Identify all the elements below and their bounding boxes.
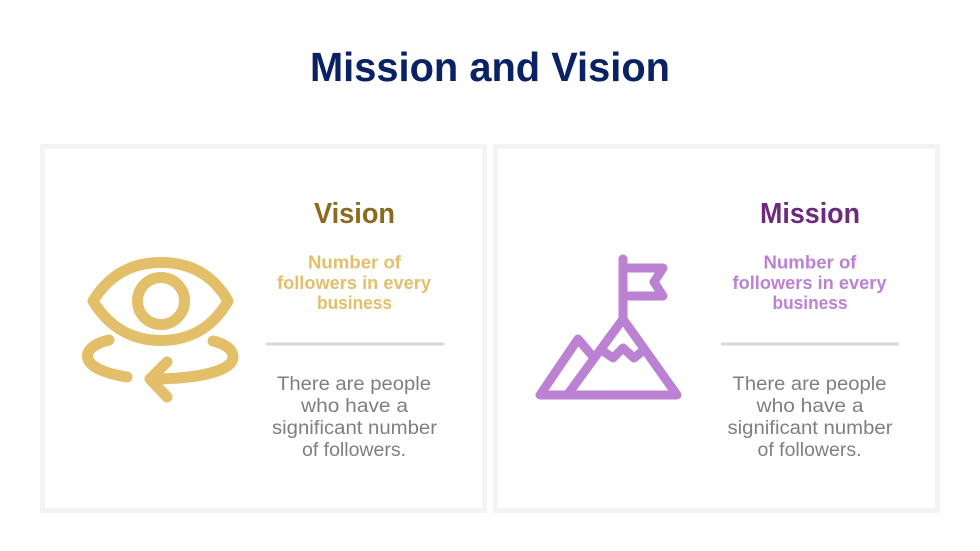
body text: vision: There are people [277,374,431,395]
panel: vision [42,146,484,510]
body text: vision [272,374,438,461]
panel frame: vision [42,146,484,510]
subheading: vision: followers in every [277,272,432,293]
body text: mission: significant number [728,418,893,439]
divider [721,342,899,346]
subheading: vision: Number of [308,252,402,272]
body text: mission: of followers. [758,440,862,461]
body text: mission [728,374,893,461]
body text: vision: who have a [300,396,408,417]
subheading: mission: business [772,292,848,313]
body text: mission: There are people [732,374,886,395]
subheading: vision: business [317,292,392,313]
body text: vision: of followers. [302,440,406,461]
body text: mission: who have a [755,396,864,417]
subheading: vision [277,252,432,313]
body text: vision: significant number [272,418,438,439]
panel frame: mission [496,146,938,510]
divider [266,342,444,346]
icon: eye with rotation arrow [88,262,233,397]
heading: mission: Mission [760,198,860,230]
icon: mountain with flag [540,259,677,395]
title: Mission and Vision [310,44,670,90]
heading: vision: Vision [314,198,395,230]
subheading: mission: followers in every [732,272,887,293]
subheading: mission: Number of [764,252,857,272]
panel: mission [496,146,938,510]
subheading: mission [732,252,887,313]
